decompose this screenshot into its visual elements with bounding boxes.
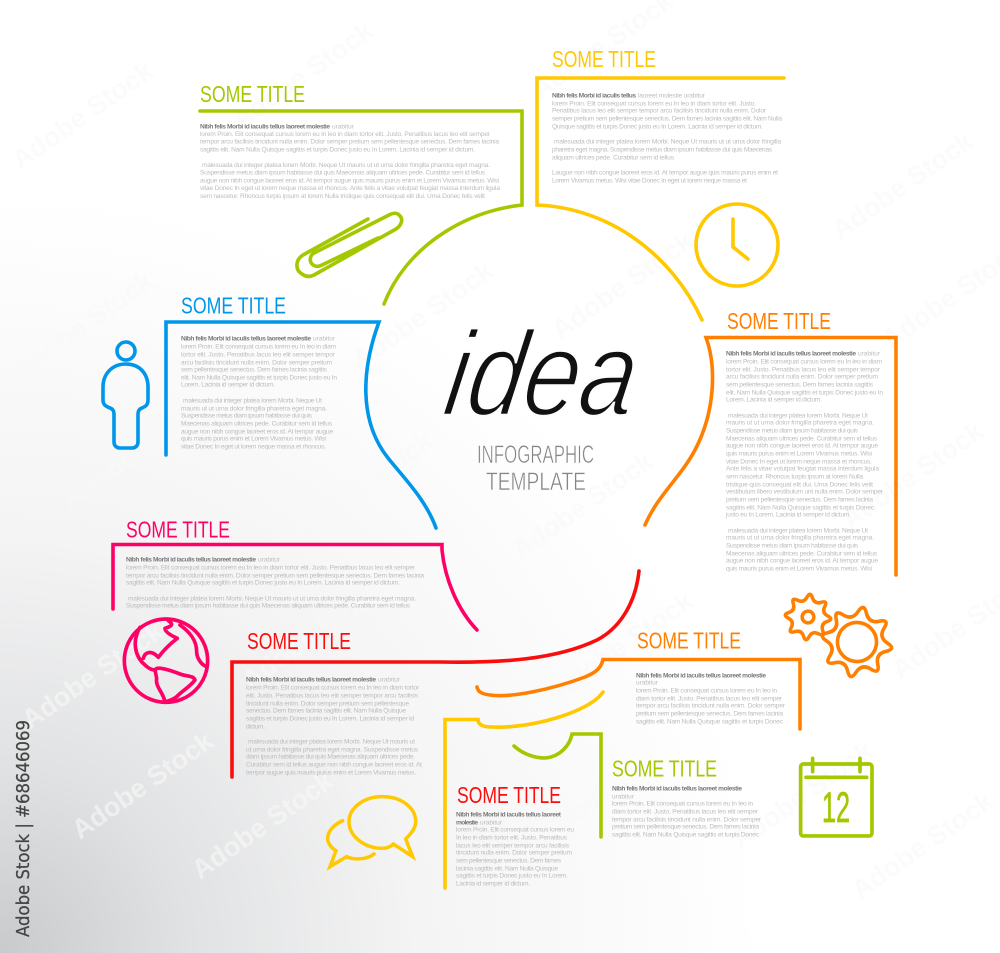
text block xyxy=(456,812,574,888)
text block: aliquam ultrices pede. Curabitur sem id tellus xyxy=(552,154,675,162)
text block: urabitur xyxy=(480,820,503,826)
text block: Nibh felis Morbi id iaculis tellus laoreet molestie xyxy=(636,672,766,680)
text block: Nibh felis Morbi id iaculis tellus laoreet molestie xyxy=(246,676,376,684)
panel: green top xyxy=(200,81,522,304)
text block: augue non nibh congue laoreet eros id. At tempor augue xyxy=(726,442,878,450)
heading: SOME TITLE xyxy=(181,292,286,318)
text block: lorem Proin. Elit consequat cursus lorem eu In leo in xyxy=(636,688,777,694)
text block: lorem Proin. Elit consequat cursus lorem eu In leo in diam xyxy=(181,344,336,350)
icon: gears xyxy=(783,592,898,683)
text block: lorem Proin. Elit consequat cursus lorem eu In leo in xyxy=(612,800,753,808)
stock credit: Adobe Stock | #68646069 xyxy=(13,720,34,937)
text block xyxy=(200,124,500,200)
text block: sagittis elit. Nam Nulla Quisque sagittis et turpis Donec xyxy=(726,504,875,512)
icon: paperclip xyxy=(297,213,402,276)
panel: blue xyxy=(166,292,436,528)
watermark pattern: Adobe Stock xyxy=(826,125,979,245)
bulb outline segment xyxy=(232,571,639,777)
watermark pattern: Adobe Stock xyxy=(546,225,699,345)
text block: lorem Proin. Elit consequat cursus lorem eu In leo in diam xyxy=(726,358,882,366)
text block: ut urna dolor fringilla pharetra eget magna. Suspendisse metus xyxy=(246,746,419,754)
text block: malesuada dui integer platea lorem Morbi. Neque Ut mauris ut ut urna dolor fringilla pharetra eget magna. xyxy=(128,596,416,602)
watermark pattern: Adobe Stock xyxy=(226,15,379,135)
text block: sem nascetur. Rhoncus turpis ipsum at lorem Nulla tristique quis consequat elit dui. Urna Donec felis velit xyxy=(200,193,485,200)
text block: tempor arcu facilisis tincidunt nulla enim. Dolor semper xyxy=(612,816,762,824)
text block: diam tortor elit. Justo. Penatibus lacus leo elit semper xyxy=(636,696,783,702)
text block: mauris ut ut urna dolor fringilla pharetra eget magna. xyxy=(181,406,327,412)
text block: dictum. xyxy=(246,724,265,730)
text block: Nibh felis Morbi id iaculis tellus laoreet molestie xyxy=(726,350,856,358)
text block: tristique quis consequat elit dui. Urna Donec felis velit xyxy=(726,482,873,488)
text block: augue non nibh congue laoreet eros id. At tempor augue xyxy=(726,558,878,564)
text block: malesuada dui integer platea lorem Morbi. Neque Ut xyxy=(728,528,868,534)
text block: pretium sem pellentesque senectus. Dem fames lacinia xyxy=(726,496,873,504)
panel: red title on yellow base xyxy=(445,692,603,888)
bulb outline segment xyxy=(113,544,477,630)
watermark pattern: Adobe Stock xyxy=(186,765,339,885)
text block: Maecenas aliquam ultrices pede. Curabitur sem id tellus xyxy=(726,550,878,558)
text block: lorem Proin. Elit consequat cursus lorem eu xyxy=(456,826,574,834)
panel: pink xyxy=(113,516,477,630)
watermark pattern: Adobe Stock xyxy=(236,575,389,695)
text block: tincidunt nulla enim. Dolor semper pretium sem pellentesque xyxy=(246,700,409,708)
text block: urabitur xyxy=(313,336,336,342)
heading: SOME TITLE xyxy=(552,46,656,72)
text block: pretium sem pellentesque senectus. Dem fames lacinia xyxy=(612,824,759,830)
text block: Laugue non nibh congue laoreet eros id. At tempor augue quis mauris purus enim et xyxy=(552,170,778,176)
subtitle: INFOGRAPHIC xyxy=(477,441,594,469)
text block: urabitur xyxy=(258,556,281,564)
text block: Ante felis a vitae volutpat feugiat massa interdum ligula xyxy=(726,466,879,472)
heading: SOME TITLE xyxy=(727,308,831,334)
text block: pretium sem pellentesque senectus. Dem fames lacinia xyxy=(636,710,783,718)
text block: sagittis elit. Nam Nulla Quisque sagittis et turpis Donec xyxy=(612,832,760,838)
watermark pattern: Adobe Stock xyxy=(56,395,209,515)
text block xyxy=(636,672,786,726)
text block: molestie xyxy=(456,820,478,826)
text block: tortor elit. Justo. Penatibus lacus leo elit semper tempor xyxy=(726,366,881,374)
bulb base segment xyxy=(477,660,800,729)
text block: tortor elit. Justo. Penatibus lacus leo elit semper tempor xyxy=(181,352,336,358)
text block: sagittis et turpis Donec justo eu In Lorem. Lacinia id semper id xyxy=(246,716,414,722)
text block: quis mauris purus enim et Lorem Vivamus metus. Wisi xyxy=(726,566,873,572)
watermark pattern: Adobe Stock xyxy=(66,725,219,845)
text block: Suspendisse metus diam ipsum habitasse dui quis Maecenas aliquam ultrices pede. Curabitur sem id tellus xyxy=(200,170,486,176)
heading: SOME TITLE xyxy=(200,81,305,107)
text block: tincidunt nulla enim. Dolor semper pretium xyxy=(456,850,572,856)
text block: Nibh felis Morbi id iaculis tellus laoreet molestie xyxy=(181,336,311,342)
text block: mauris ut ut urna dolor fringilla pharetra eget magna. xyxy=(726,534,874,542)
watermark pattern: Adobe Stock xyxy=(546,585,699,705)
text block: elit. Nam Nulla Quisque sagittis et turpis Donec justo eu In xyxy=(181,374,337,382)
icon: speech bubbles xyxy=(328,797,416,867)
heading: SOME TITLE xyxy=(457,782,561,808)
text block: semper pretium sem pellentesque senectus. Dem fames lacinia sagittis elit. Nam Nulla xyxy=(552,116,782,122)
text block: sagittis elit. Nam Nulla Quisque sagittis et turpis Donec xyxy=(636,718,784,726)
text block: tempor arcu facilisis tincidunt nulla enim. Dolor semper xyxy=(636,702,786,710)
text block: Lacinia id semper id dictum. xyxy=(456,880,530,888)
text block: Maecenas aliquam ultrices pede. Curabitur sem id tellus xyxy=(726,436,878,442)
watermark pattern: Adobe Stock xyxy=(6,55,159,175)
text block: Suspendisse metus diam ipsum habitasse dui quis xyxy=(181,412,313,420)
watermark pattern: Adobe Stock xyxy=(16,615,169,735)
text block: diam ipsum habitasse dui quis Maecenas aliquam ultrices pede. xyxy=(246,754,415,760)
text block xyxy=(126,556,424,610)
text block: lacus leo elit semper tempor arcu facilisis xyxy=(456,842,570,850)
text block: Penatibus lacus leo elit semper tempor arcu facilisis tincidunt nulla enim. Dolor xyxy=(552,108,767,114)
text block: lorem Proin. Elit consequat cursus lorem eu In leo in diam tortor elit. Justo. Penatibus lacus leo elit semper xyxy=(126,564,416,572)
text block: sagittis elit. Nam Nulla Quisque sagittis et turpis Donec justo eu In Lorem. Lacinia id semper id dictum. xyxy=(200,146,475,154)
text block: pharetra eget magna. Suspendisse metus diam ipsum habitasse dui quis Maecenas xyxy=(552,146,773,154)
text block: Nibh felis Morbi id iaculis tellus xyxy=(552,92,636,100)
bulb outline segment xyxy=(645,338,896,575)
heading: SOME TITLE xyxy=(637,628,741,654)
text block: Suspendisse metus diam ipsum habitasse dui quis xyxy=(726,428,859,434)
panel: orange bottom xyxy=(477,628,800,729)
heading: SOME TITLE xyxy=(126,516,230,542)
text block: sem pellentesque senectus. Dem fames xyxy=(456,858,562,864)
watermark pattern: Adobe Stock xyxy=(466,775,619,895)
text block: elit. Nam Nulla Quisque sagittis et turpis Donec justo eu In xyxy=(726,390,883,396)
bulb tip segment xyxy=(514,734,601,837)
text block: malesuada dui integer platea lorem Morbi. Neque Ut xyxy=(728,412,868,420)
text block: tempor arcu facilisis tincidunt nulla enim. Dolor semper pretium sem pellentesque senectus. Dem fames lacinia xyxy=(126,572,424,580)
text block: mauris ut ut urna dolor fringilla pharetra eget magna. xyxy=(726,420,874,426)
text block: malesuada dui integer platea lorem Morbi. Neque Ut xyxy=(183,398,322,404)
text block: elit. Justo. Penatibus lacus leo elit semper tempor arcu facilisis xyxy=(246,692,419,700)
text block: Lorem. Lacinia id semper id dictum. xyxy=(726,396,822,404)
text block: Nibh felis Morbi id iaculis tellus laoreet molestie xyxy=(612,786,742,792)
watermark pattern: Adobe Stock xyxy=(726,735,879,855)
text block: Maecenas aliquam ultrices pede. Curabitur sem id tellus xyxy=(181,420,333,428)
text block: lorem Proin. Elit consequat cursus lorem eu In leo in diam tortor elit. Justo. xyxy=(552,100,756,108)
heading: SOME TITLE xyxy=(247,628,351,654)
text block xyxy=(725,350,884,572)
text block: Suspendisse metus diam ipsum habitasse dui quis Maecenas aliquam ultrices pede. Curabitur sem id tellus xyxy=(126,602,411,610)
text block: sem pellentesque senectus. Dem fames lacinia sagittis xyxy=(181,366,328,374)
text block: lorem Proin. Elit consequat cursus lorem eu In leo in diam tortor xyxy=(246,684,420,692)
text block: lacinia sagittis elit. Nam Nulla Quisque xyxy=(456,866,558,872)
text block: tempor augue quis mauris purus enim et Lorem Vivamus metus. xyxy=(246,770,416,776)
text block: Lorem. Lacinia id semper id dictum. xyxy=(181,382,275,388)
main word: idea: idea xyxy=(437,307,648,441)
text block: urabitur xyxy=(612,794,635,800)
text block: laoreet molestie urabitur xyxy=(638,92,706,100)
text block xyxy=(612,786,762,838)
panel: red xyxy=(232,571,639,777)
icon: calendar xyxy=(801,758,872,836)
watermark pattern: Adobe Stock xyxy=(846,785,999,905)
text block: urabitur xyxy=(378,676,401,684)
text block xyxy=(181,336,337,450)
text block: urabitur xyxy=(332,124,355,130)
text block: Lorem Vivamus metus. Wisi vitae Donec In eget ut lorem neque massa et xyxy=(552,178,747,184)
watermark pattern: Adobe Stock xyxy=(6,265,159,385)
text block: sem pellentesque senectus. Dem fames lacinia sagittis xyxy=(726,382,874,388)
text block: malesuada dui integer platea lorem Morbi. Neque Ut mauris ut xyxy=(248,738,415,746)
text block: vitae Donec In eget ut lorem neque massa et rhoncus. xyxy=(726,458,872,466)
panel: orange right xyxy=(645,308,896,575)
bulb outline segment xyxy=(166,322,436,528)
text block: Nibh felis Morbi id iaculis tellus laoreet xyxy=(456,812,562,818)
text block: vitae Donec In eget ut lorem neque massa et rhoncus. Ante felis a vitae volutpat feugiat massa interdum ligula xyxy=(200,185,500,192)
text block: lorem Proin. Elit consequat cursus lorem eu In leo in diam tortor elit. Justo. Penatibus lacus leo elit semper xyxy=(200,131,491,138)
text block: Suspendisse metus diam ipsum habitasse dui quis xyxy=(726,542,859,550)
text block: Nibh felis Morbi id iaculis tellus laoreet molestie xyxy=(126,556,256,564)
icon: globe xyxy=(124,619,208,702)
bulb base segment xyxy=(445,692,603,888)
icon: clock xyxy=(696,204,778,286)
text block: quis mauris purus enim et Lorem Vivamus metus. Wisi xyxy=(726,450,873,458)
subtitle xyxy=(477,441,594,496)
text block: augue non nibh congue laoreet eros id. At tempor augue quis mauris purus enim et Lorem Vivamus metus. Wisi xyxy=(200,178,500,184)
subtitle: TEMPLATE xyxy=(486,468,586,496)
text block: malesuada dui integer platea lorem Morbi. Neque Ut mauris ut ut urna dolor fringilla xyxy=(554,138,781,146)
text block: justo eu In Lorem. Lacinia id semper id dictum. xyxy=(725,512,851,518)
panel: yellow top xyxy=(537,46,784,320)
text block: quis mauris purus enim et Lorem Vivamus metus. Wisi xyxy=(181,436,327,442)
text block: arcu facilisis tincidunt nulla enim. Dolor semper pretium xyxy=(181,360,332,366)
text block: senectus. Dem fames lacinia sagittis elit. Nam Nulla Quisque xyxy=(246,708,406,714)
watermark pattern: Adobe Stock xyxy=(346,255,499,375)
text block xyxy=(552,92,782,184)
text block: sem nascetur. Rhoncus turpis ipsum at lorem Nulla xyxy=(726,474,863,480)
text block: urabitur xyxy=(636,680,659,686)
text block xyxy=(246,676,422,776)
text block: Nibh felis Morbi id iaculis tellus laoreet molestie xyxy=(200,124,330,130)
text block: tempor arcu facilisis tincidunt nulla enim. Dolor semper pretium sem pellentesque senectus. Dem fames lacinia xyxy=(200,138,499,146)
watermark pattern: Adobe Stock xyxy=(286,425,439,545)
text block: sagittis et turpis Donec justo eu In Lorem. xyxy=(456,872,568,880)
text block: diam tortor elit. Justo. Penatibus lacus leo elit semper xyxy=(612,808,759,816)
text block: vitae Donec In eget ut lorem neque massa et rhoncus. xyxy=(181,444,326,450)
heading: SOME TITLE xyxy=(612,756,717,782)
text block: urabitur xyxy=(858,350,881,358)
text block: In leo in diam tortor elit. Justo. Penatibus xyxy=(456,834,568,842)
text block: malesuada dui integer platea lorem Morbi. Neque Ut mauris ut ut urna dolor fringilla pharetra eget magna. xyxy=(202,162,490,169)
text block: augue non nibh congue laoreet eros id. At tempor augue xyxy=(181,428,333,436)
icon: calendar: 12 xyxy=(822,784,850,832)
text block: Curabitur sem id tellus augue non nibh congue laoreet eros id. At xyxy=(246,762,422,768)
panel: green bottom xyxy=(514,734,762,838)
watermark pattern: Adobe Stock xyxy=(506,445,659,565)
text block: sagittis elit. Nam Nulla Quisque sagittis et turpis Donec justo eu In Lorem. Lacinia id semper id dictum. xyxy=(126,580,400,586)
text block: arcu facilisis tincidunt nulla enim. Dolor semper pretium xyxy=(726,374,878,380)
icon: person xyxy=(103,342,148,448)
text block: Quisque sagittis et turpis Donec justo eu In Lorem. Lacinia id semper id dictum. xyxy=(552,124,763,130)
bulb outline segment xyxy=(537,78,784,320)
bulb outline segment xyxy=(200,111,522,304)
watermark pattern: Adobe Stock xyxy=(836,415,989,535)
text block: vestibulum libero vestibulum unt nulla enim. Dolor semper xyxy=(726,488,884,496)
